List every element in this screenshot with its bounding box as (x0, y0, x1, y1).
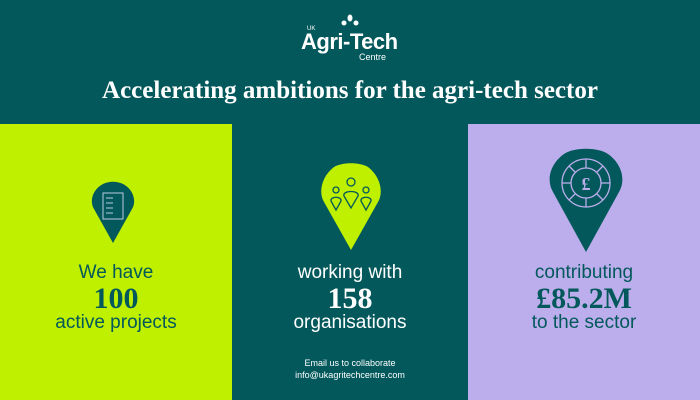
contact text: info@ukagritechcentre.com (295, 370, 405, 380)
panel: projects: We have (79, 262, 153, 283)
panel: organisations (293, 163, 407, 380)
logo: Agri-Tech (301, 29, 398, 54)
icon: droplets (342, 14, 358, 26)
panel: projects (0, 124, 232, 400)
logo: Centre (359, 52, 386, 62)
panel: funding: £85.2M (536, 282, 632, 315)
contact text (295, 358, 405, 380)
logo (301, 14, 398, 62)
panel: projects: active projects (55, 312, 177, 333)
panel: organisations: organisations (293, 312, 407, 333)
panel: funding: to the sector (532, 312, 636, 333)
logo: UK (307, 26, 315, 32)
panel: projects: 100 (94, 282, 138, 315)
panel: organisations: working with (298, 262, 402, 283)
icon: checklist pin (92, 182, 134, 243)
icon: people pin (321, 163, 381, 250)
icon: pound coin pin: £ (582, 174, 590, 194)
panel: organisations: 158 (328, 282, 372, 315)
icon: pound coin pin (550, 148, 622, 252)
panel: funding (468, 124, 700, 400)
panel: funding: contributing (535, 262, 633, 283)
title: Accelerating ambitions for the agri-tech sector (102, 77, 598, 104)
contact text: Email us to collaborate (304, 358, 396, 368)
